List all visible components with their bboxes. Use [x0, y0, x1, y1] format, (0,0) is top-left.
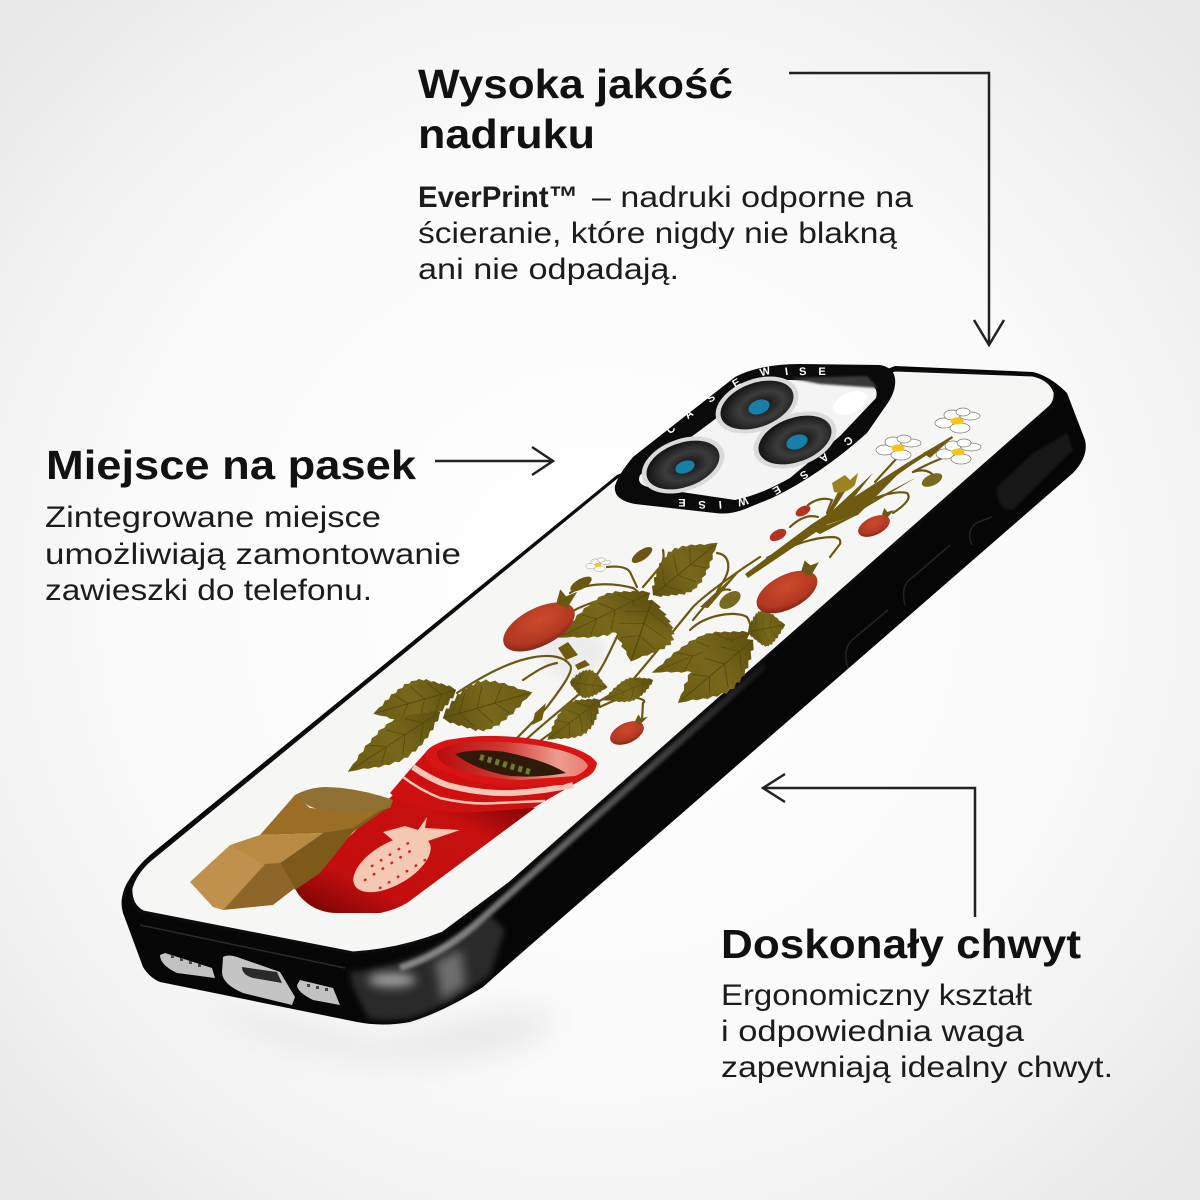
heading: Doskonały chwyt — [721, 921, 1081, 967]
body text: zapewniają idealny chwyt. — [721, 1051, 1113, 1084]
bump lettering: W — [736, 494, 749, 508]
side switch — [997, 433, 1073, 510]
bottom corner gloss — [350, 915, 505, 1020]
callout: print quality — [418, 61, 913, 286]
heading: Miejsce na pasek — [46, 442, 416, 488]
phone in black case — [122, 364, 1086, 1024]
callout: grip — [721, 921, 1113, 1084]
arrow: grip — [763, 774, 975, 917]
artwork: tapered stem and spiky leaves — [532, 436, 953, 725]
bump lettering: A — [817, 450, 831, 465]
heading: Wysoka jakość — [418, 61, 733, 107]
bump lettering: A — [682, 407, 696, 422]
body text: – nadruki odporne na — [592, 181, 913, 214]
charging ports — [160, 953, 340, 1005]
body text: zawieszki do telefonu. — [45, 574, 372, 607]
body text — [45, 501, 461, 607]
bump lettering: I — [784, 366, 789, 378]
case body — [122, 366, 1086, 1024]
artwork: wooden blocks — [190, 787, 393, 910]
artwork: strawberries and buds — [493, 470, 944, 750]
bump lettering: E — [730, 376, 743, 390]
phone shadow — [190, 1000, 560, 1062]
bump lettering: S — [698, 498, 706, 510]
heading — [418, 61, 733, 157]
bump lettering: C — [841, 433, 855, 447]
bump lettering — [664, 365, 855, 510]
artwork: stems — [457, 457, 945, 755]
bump lettering: S — [705, 392, 718, 406]
body text — [721, 979, 1113, 1084]
side edge highlight — [400, 665, 765, 968]
artwork: leaves — [337, 524, 789, 789]
bump lettering: S — [797, 467, 810, 481]
printed back panel — [131, 370, 1055, 953]
artwork: strawberry flowers — [586, 408, 981, 572]
magnetic ring shade — [540, 629, 604, 677]
body text: ścieranie, które nigdy nie blakną — [418, 217, 897, 250]
body text: EverPrint™ — [418, 181, 578, 214]
bump lettering: E — [770, 483, 783, 497]
callout: strap slot — [45, 442, 461, 607]
body text: Ergonomiczny kształt — [721, 979, 1033, 1012]
arrow: print quality — [789, 73, 1004, 345]
body text — [418, 181, 913, 286]
bump lettering: W — [759, 365, 772, 379]
pot strawberry motif — [344, 817, 460, 904]
bump lettering: E — [818, 366, 826, 378]
side buttons — [846, 517, 992, 668]
bump lettering: C — [664, 423, 678, 437]
lenses — [634, 366, 844, 504]
bump lettering: E — [678, 496, 686, 508]
heading: nadruku — [418, 111, 595, 157]
bump lettering: S — [799, 366, 807, 378]
body text: Zintegrowane miejsce — [45, 501, 381, 534]
artwork: red pot — [295, 736, 597, 913]
body text: i odpowiednia waga — [721, 1015, 1024, 1048]
camera bump — [615, 364, 895, 514]
body text: umożliwiają zamontowanie — [45, 538, 461, 571]
body text: ani nie odpadają. — [418, 253, 679, 286]
bump lettering: I — [718, 498, 722, 510]
arrow: strap slot — [435, 447, 553, 475]
